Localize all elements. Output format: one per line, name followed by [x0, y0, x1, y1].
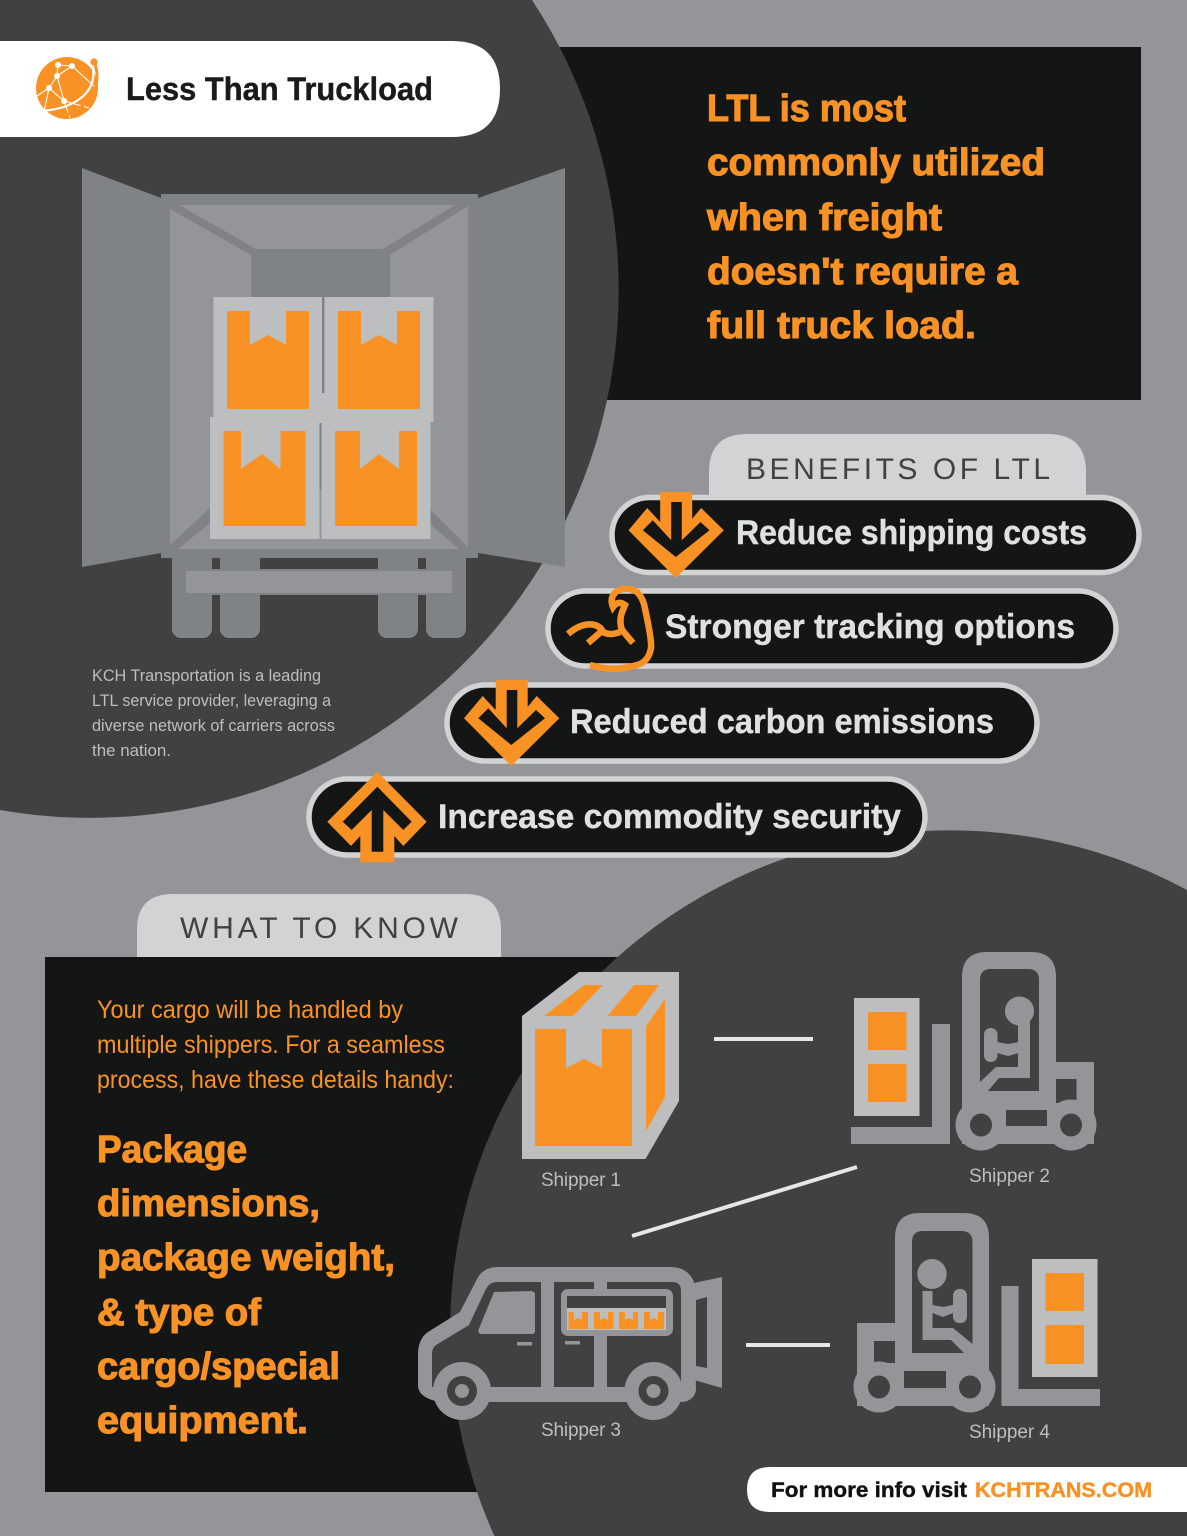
headline text: doesn't require a: [707, 251, 1019, 293]
icon: orange globe logo: [36, 57, 98, 119]
headline text: full truck load.: [707, 305, 976, 347]
intro text: Your cargo will be handled by: [97, 996, 403, 1024]
key details text: Package: [97, 1129, 247, 1171]
truck doors: [82, 168, 565, 567]
icon: shipper 2 forklift: [851, 952, 1096, 1150]
truck interior: [161, 194, 478, 558]
caption text: LTL service provider, leveraging a: [92, 691, 332, 710]
key details text: [97, 1129, 395, 1442]
benefit: increase commodity security: [309, 772, 925, 862]
footer call to action: For more info visit: [771, 1479, 967, 1502]
headline text: LTL is most: [707, 88, 906, 130]
icon: shipper 4 forklift: [854, 1213, 1100, 1412]
benefit: reduce shipping costs: [612, 492, 1139, 578]
icon: down arrow: [628, 492, 724, 578]
label: shipper 1: Shipper 1: [541, 1170, 621, 1191]
intro text: process, have these details handy:: [97, 1066, 454, 1094]
icon: shipper 3 van: [418, 1267, 722, 1420]
heading tab: what to know: WHAT TO KNOW: [180, 912, 459, 945]
caption text: KCH Transportation is a leading: [92, 666, 321, 685]
footer call to action: [747, 1467, 1187, 1512]
connector lines: [632, 1039, 857, 1345]
key details text: cargo/special: [97, 1346, 340, 1388]
header pill: [0, 41, 500, 137]
title: Less Than Truckload: [126, 71, 433, 107]
label: shipper 4: Shipper 4: [969, 1422, 1050, 1443]
benefit: increase commodity security: Increase commodity security: [438, 798, 901, 836]
icon: up arrow: [327, 772, 427, 862]
truck undercarriage: [172, 540, 466, 638]
dark circle bottom right: [450, 830, 1187, 1536]
caption text: diverse network of carriers across: [92, 716, 335, 735]
caption text: the nation.: [92, 741, 171, 760]
intro text: multiple shippers. For a seamless: [97, 1031, 445, 1059]
intro text: [97, 996, 454, 1094]
key details text: dimensions,: [97, 1183, 320, 1225]
icon: flexed arm: [568, 589, 651, 669]
headline text: commonly utilized: [707, 142, 1045, 184]
panel: headline statement: [520, 47, 1141, 400]
illustration: open truck with boxes: [82, 168, 565, 638]
key details text: & type of: [97, 1292, 261, 1334]
footer call to action: KCHTRANS.COM: [975, 1479, 1152, 1502]
heading tab: what to know: [137, 894, 501, 958]
headline text: [706, 88, 1045, 347]
cargo boxes: [210, 297, 434, 539]
panel: what to know: [45, 894, 645, 1492]
key details text: package weight,: [97, 1237, 395, 1279]
van cargo window: [561, 1289, 673, 1336]
headline text: when freight: [706, 197, 942, 239]
icon: down arrow: [464, 680, 559, 766]
icon: shipper 1 package: [522, 972, 679, 1159]
key details text: equipment.: [97, 1400, 308, 1442]
panel: benefits of LTL: [309, 434, 1139, 862]
caption text: [92, 666, 335, 760]
benefit: reduced carbon emissions: [447, 680, 1037, 766]
benefit: stronger tracking options: [548, 589, 1116, 669]
label: shipper 2: Shipper 2: [969, 1166, 1050, 1187]
label: shipper 3: Shipper 3: [541, 1420, 621, 1441]
dark circle top left: [0, 0, 619, 818]
benefit: reduced carbon emissions: Reduced carbon emissions: [570, 703, 994, 741]
benefit: stronger tracking options: Stronger tracking options: [665, 608, 1075, 646]
heading tab: benefits: [709, 434, 1086, 500]
heading tab: benefits: BENEFITS OF LTL: [746, 453, 1050, 486]
benefit: reduce shipping costs: Reduce shipping costs: [736, 514, 1087, 552]
